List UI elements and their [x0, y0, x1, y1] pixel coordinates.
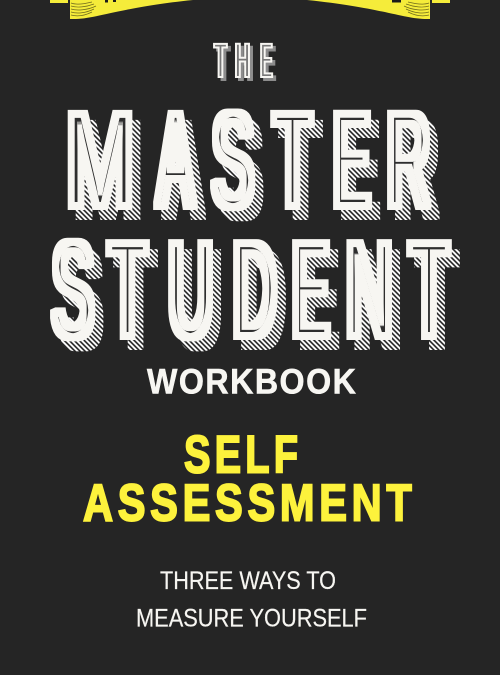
tagline line 1: THREE WAYS TO [160, 567, 336, 595]
title word: MASTER: E [334, 85, 369, 235]
subtitle: WORKBOOK: WORKBOOK [147, 363, 356, 402]
title word: STUDENT: E [293, 214, 329, 365]
title word: MASTER: M [66, 85, 134, 235]
heading: ASSESSMENT: ASSESSMENT [83, 473, 412, 532]
title word: STUDENT [52, 214, 448, 366]
title word: THE: E [261, 33, 272, 88]
title word: MASTER: A [158, 85, 193, 235]
title word: THE: H [235, 34, 250, 87]
title word: STUDENT: D [233, 215, 276, 366]
heading: SELF: SELF [184, 425, 298, 484]
title word: STUDENT: T [410, 216, 448, 365]
cover page [50, 0, 460, 627]
hatched drop shadow of MASTER STUDENT [60, 120, 460, 352]
title word: MASTER [66, 84, 429, 236]
tagline line 2: MEASURE YOURSELF [136, 604, 367, 632]
title word: MASTER: T [274, 86, 311, 236]
ribbon banner [50, 0, 450, 19]
title word: MASTER: R [387, 84, 429, 235]
title word: STUDENT: T [109, 215, 146, 366]
title word: STUDENT: U [168, 215, 213, 366]
title word: MASTER: S [212, 86, 253, 236]
title word: STUDENT: N [346, 215, 392, 365]
title word: STUDENT: S [52, 215, 93, 366]
title word: THE [215, 33, 272, 88]
title word: THE: T [215, 34, 226, 88]
